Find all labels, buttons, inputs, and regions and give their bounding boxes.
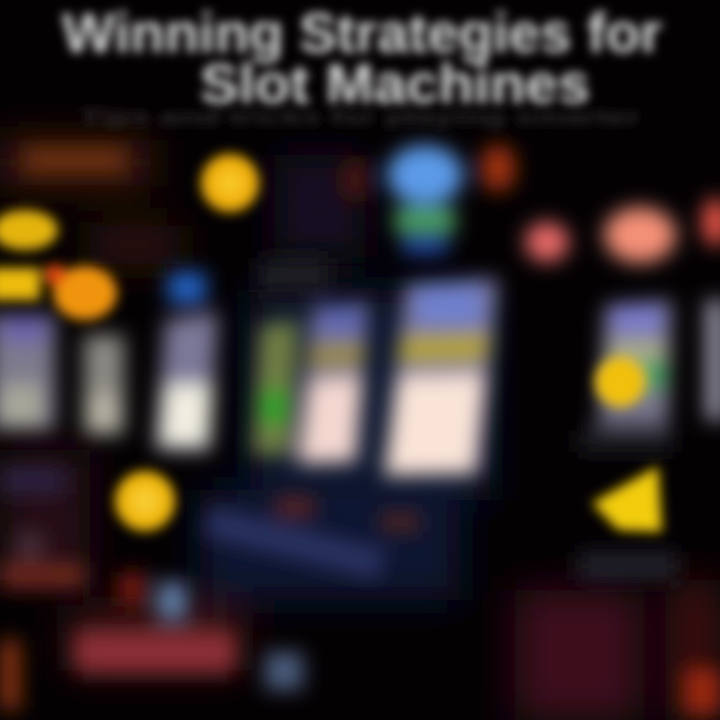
icon: gold coin right (595, 357, 645, 407)
slot machine: right (578, 300, 720, 580)
subtitle: Tips and tricks for playing smarter (80, 107, 640, 129)
slot machine: large centre right (384, 278, 498, 476)
icon: gold coins left (0, 210, 117, 320)
top lights (25, 144, 720, 263)
title line 2: Slot Machines (200, 52, 590, 115)
slot machine: far left (0, 315, 124, 435)
slot machine: centre (252, 258, 368, 465)
title (62, 1, 662, 115)
icon: gold triangle right (592, 466, 662, 532)
slot machine: centre left (155, 272, 218, 452)
icon: gold coin bottom left (115, 471, 175, 531)
machine control panels (0, 468, 720, 714)
icon: gold coin top (201, 154, 259, 212)
title line 1: Winning Strategies for (62, 1, 662, 64)
